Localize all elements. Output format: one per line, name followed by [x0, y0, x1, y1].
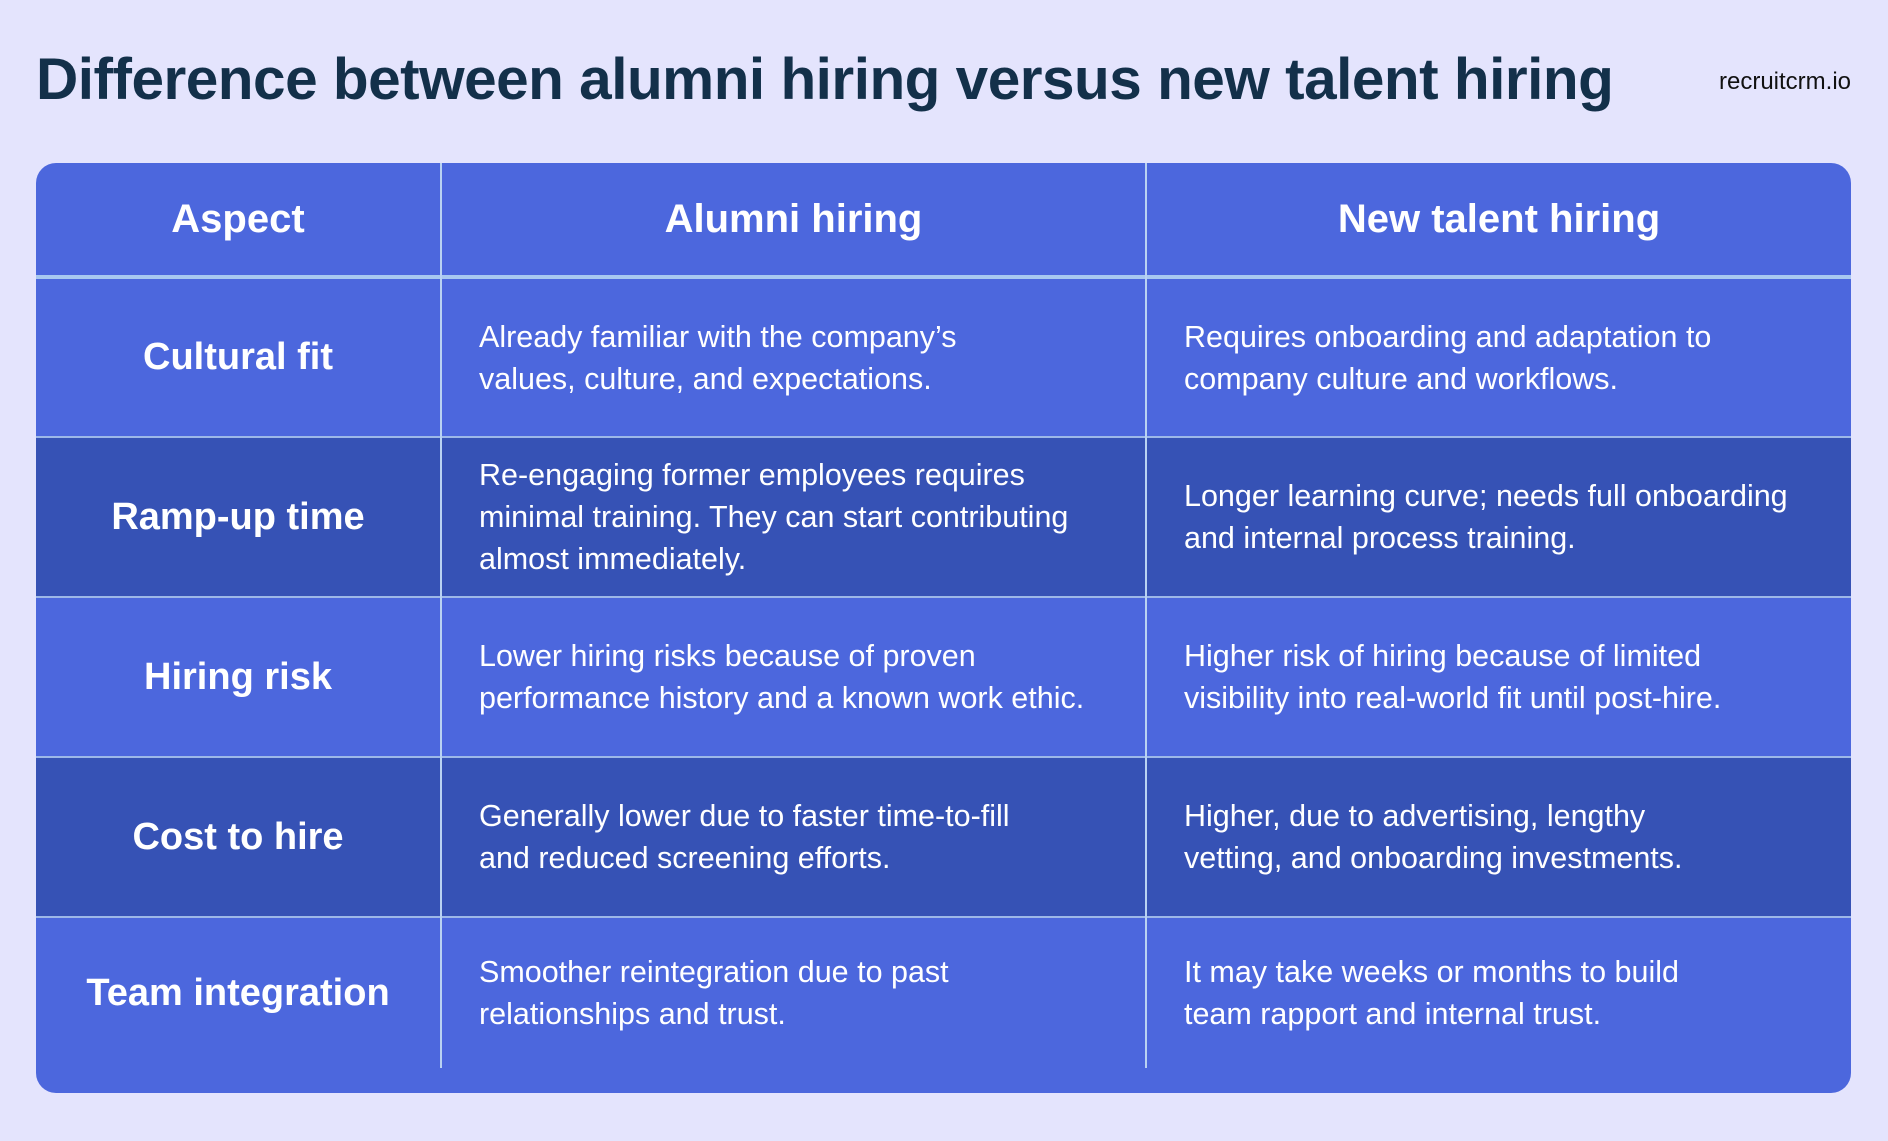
title: Difference between alumni hiring versus new talent hiring — [36, 47, 1613, 112]
row: Ramp-up time: Re-engaging former employees requires — [479, 458, 1025, 492]
row: Ramp-up time — [111, 458, 1788, 576]
row: Ramp-up time: Ramp-up time — [111, 496, 365, 538]
row: Team integration — [86, 955, 1679, 1031]
row: Cost to hire: Generally lower due to faster time-to-fill — [479, 799, 1010, 833]
row: Ramp-up time: Longer learning curve; needs full onboarding — [1184, 479, 1788, 513]
row: Team integration: relationships and trust. — [479, 997, 786, 1031]
row: Hiring risk: Hiring risk — [144, 656, 332, 698]
row: Hiring risk: visibility into real-world fit until post-hire. — [1184, 681, 1721, 715]
row: Team integration: Team integration — [86, 972, 390, 1014]
row: Cultural fit: company culture and workflows. — [1184, 362, 1618, 396]
row: Cultural fit: values, culture, and expectations. — [479, 362, 932, 396]
row: Cost to hire: vetting, and onboarding investments. — [1184, 841, 1682, 875]
row: Ramp-up time: and internal process training. — [1184, 521, 1576, 555]
header: New talent hiring: New talent hiring — [1338, 196, 1660, 240]
header row — [171, 196, 1660, 240]
header: Alumni hiring: Alumni hiring — [665, 196, 922, 240]
row: Team integration: team rapport and internal trust. — [1184, 997, 1601, 1031]
row: Hiring risk: Higher risk of hiring because of limited — [1184, 639, 1701, 673]
row: Hiring risk: Lower hiring risks because of proven — [479, 639, 976, 673]
row: Cost to hire: Higher, due to advertising, lengthy — [1184, 799, 1645, 833]
row: Cultural fit: Already familiar with the company’s — [479, 320, 956, 354]
row: Cost to hire: and reduced screening efforts. — [479, 841, 890, 875]
row: Cultural fit: Cultural fit — [143, 336, 333, 378]
row: Hiring risk — [144, 639, 1721, 715]
table — [36, 163, 1851, 1093]
brand: recruitcrm.io — [1719, 68, 1851, 95]
header: Aspect: Aspect — [171, 196, 305, 240]
row: Cost to hire — [132, 799, 1682, 875]
row: Ramp-up time: minimal training. They can start contributing — [479, 500, 1068, 534]
row: Ramp-up time: almost immediately. — [479, 542, 746, 576]
row: Cost to hire: Cost to hire — [132, 816, 344, 858]
row: Cultural fit — [143, 320, 1711, 396]
row: Team integration: Smoother reintegration due to past — [479, 955, 949, 989]
row: Cultural fit: Requires onboarding and adaptation to — [1184, 320, 1711, 354]
row: Hiring risk: performance history and a known work ethic. — [479, 681, 1084, 715]
row: Team integration: It may take weeks or months to build — [1184, 955, 1679, 989]
